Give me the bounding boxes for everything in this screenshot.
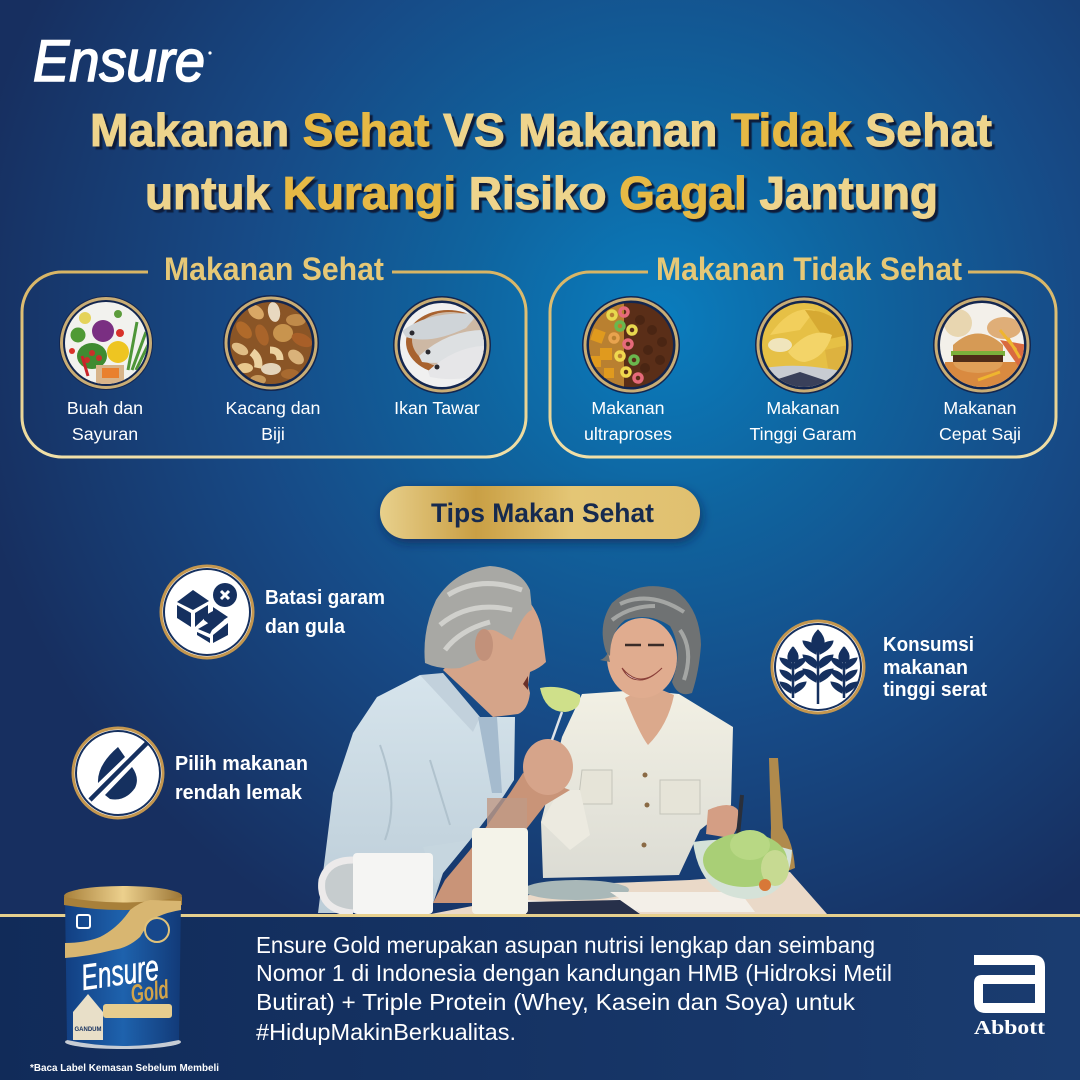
product: Ensure Gold can: Gold	[129, 974, 171, 1009]
description text: #HidupMakinBerkualitas.	[256, 1019, 516, 1045]
label: Kacang dan Biji: Kacang dan	[226, 398, 320, 418]
icon: crossed-out fat drop	[73, 728, 163, 818]
text: Konsumsi makanan tinggi serat: Konsumsi	[883, 634, 974, 656]
label: Ikan Tawar: Ikan Tawar	[394, 398, 480, 418]
tip: Konsumsi makanan tinggi serat	[772, 621, 987, 713]
can gold swoosh	[65, 900, 181, 958]
food: fast food	[933, 296, 1031, 394]
glass of milk	[472, 798, 528, 914]
tablet and napkin	[526, 892, 755, 914]
logo: Abbott	[974, 955, 1045, 1039]
disclaimer: *Baca Label Kemasan Sebelum Membeli	[30, 1062, 219, 1074]
button: Tips Makan Sehat	[380, 486, 700, 539]
logo: Ensure: Ensure	[33, 29, 205, 94]
table	[431, 872, 827, 914]
text: Batasi garam dan gula: Batasi garam	[265, 586, 385, 609]
photo: senior couple eating salad	[318, 566, 827, 914]
description text: Ensure Gold merupakan asupan nutrisi lengkap dan seimbang	[256, 932, 875, 958]
can info strip	[103, 1004, 172, 1018]
label: Makanan Tinggi Garam: Makanan	[766, 398, 840, 418]
salad bowl	[693, 830, 792, 899]
tip: Batasi garam dan gula	[161, 566, 385, 658]
button: Tips Makan Sehat: Tips Makan Sehat	[431, 498, 654, 528]
label: Makanan ultraproses: Makanan	[591, 398, 665, 418]
fork in hand	[738, 795, 742, 835]
label: Kacang dan Biji: Biji	[261, 424, 285, 444]
wooden spatula	[769, 758, 795, 872]
man	[318, 566, 573, 913]
food: nuts and seeds	[223, 295, 319, 391]
food: fruit and vegetables	[59, 296, 153, 390]
description text: Nomor 1 di Indonesia dengan kandungan HMB (Hidroksi Metil	[256, 960, 892, 986]
plate	[523, 880, 629, 900]
title: untuk Kurangi Risiko Gagal Jantung	[145, 167, 938, 219]
icon: wheat stalks	[772, 621, 864, 713]
label: Buah dan Sayuran: Buah dan	[67, 398, 143, 418]
text: Batasi garam dan gula: dan gula	[265, 615, 346, 638]
can milk glass	[73, 994, 103, 1040]
salad on fork	[540, 687, 580, 740]
panel: Makanan Sehat	[22, 251, 526, 457]
label: Makanan ultraproses: ultraproses	[584, 424, 672, 444]
description text: Butirat) + Triple Protein (Whey, Kasein dan Soya) untuk	[256, 989, 856, 1015]
text: Pilih makanan rendah lemak: rendah lemak	[175, 781, 303, 804]
text: Pilih makanan rendah lemak: Pilih makanan	[175, 752, 308, 775]
title: Makanan Sehat VS Makanan Tidak Sehat	[90, 104, 992, 156]
can label text: Ensure	[78, 946, 161, 998]
label: Makanan Tinggi Garam: Tinggi Garam	[749, 424, 857, 444]
logo: Abbott: Abbott	[974, 1017, 1045, 1039]
woman	[541, 586, 738, 878]
label: Makanan Cepat Saji: Makanan	[943, 398, 1017, 418]
food: fish	[393, 296, 492, 394]
product: Ensure Gold can	[64, 886, 182, 1049]
heading: Makanan Sehat: Makanan Sehat	[164, 251, 384, 287]
food: ultra-processed cereal	[582, 296, 680, 394]
footer band	[0, 914, 1080, 1080]
icon: sugar cubes	[161, 566, 253, 658]
label: Buah dan Sayuran: Sayuran	[72, 424, 138, 444]
mug	[322, 853, 433, 914]
can milk glass: GANDUM	[74, 1027, 102, 1033]
panel: Makanan Tidak Sehat	[550, 251, 1056, 457]
label: Makanan Cepat Saji: Cepat Saji	[939, 424, 1021, 444]
can Abbott mark	[77, 915, 90, 928]
title	[90, 104, 992, 219]
text: Konsumsi makanan tinggi serat: makanan	[883, 657, 968, 679]
text: Konsumsi makanan tinggi serat: tinggi serat	[883, 679, 987, 701]
food: salty chips	[755, 296, 853, 394]
heading: Makanan Tidak Sehat: Makanan Tidak Sehat	[656, 251, 962, 287]
tip: Pilih makanan rendah lemak	[73, 728, 308, 818]
